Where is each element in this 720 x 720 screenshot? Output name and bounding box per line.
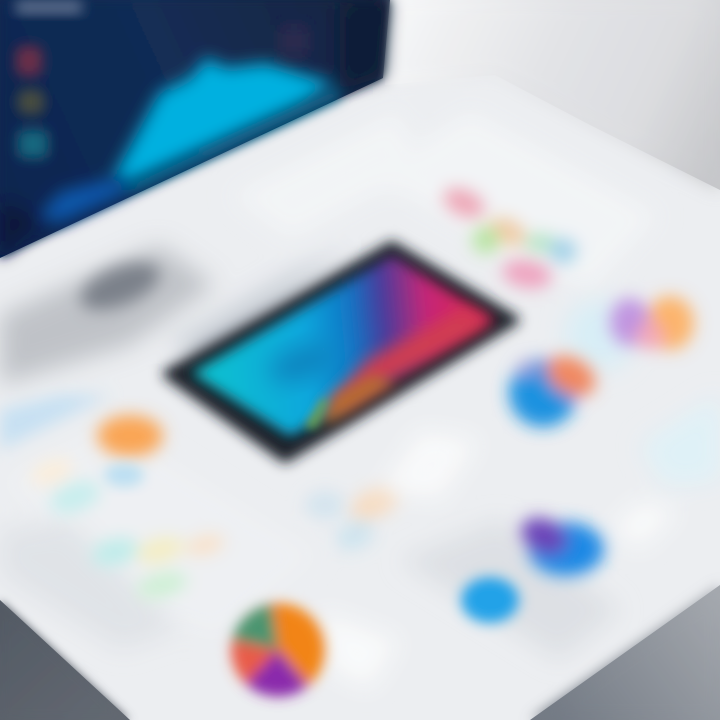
panel: right pale blue card — [640, 395, 720, 485]
monitor dark left corner — [0, 200, 40, 258]
panel: left blue strip — [0, 395, 110, 450]
chart: left pastel bars — [27, 453, 104, 519]
faint purple block — [280, 25, 308, 57]
monitor — [0, 0, 390, 258]
area chart — [112, 57, 335, 182]
icon: orange circle — [97, 415, 163, 457]
icon: multicolour pie bottom — [231, 603, 325, 697]
monitor screen — [0, 0, 390, 258]
icon: pale blue circle — [104, 463, 144, 487]
screen orange wedge — [318, 375, 395, 425]
tablet screen — [192, 256, 495, 436]
panel: card highlights — [320, 430, 680, 690]
tablet body — [168, 246, 514, 458]
screen red wedge — [325, 310, 488, 408]
top highlight — [16, 0, 82, 14]
panel: lower left card — [0, 425, 320, 640]
monitor stand — [74, 253, 166, 319]
panel: top right card — [370, 110, 660, 290]
icon: purple and blue circle — [515, 510, 604, 576]
chart: lower left multicolour bars — [88, 530, 227, 603]
icon: pie chart centre right — [509, 347, 603, 427]
monitor base area — [0, 110, 420, 385]
screen dark blue patch — [265, 338, 339, 388]
panel: lower right card shade — [400, 520, 620, 660]
floor corner: bottom left — [0, 600, 130, 720]
sidebar legend — [16, 46, 48, 158]
area chart edge — [120, 88, 340, 190]
floor corner: bottom right — [530, 585, 720, 720]
screen green wedge — [304, 398, 328, 428]
tablet — [168, 246, 514, 458]
monitor dark right corner — [340, 0, 390, 90]
icon: blue circle — [461, 577, 519, 623]
icon: pie chart right — [610, 296, 694, 350]
panel: lower left shade — [0, 520, 180, 650]
chart: centre pastel bars — [305, 447, 457, 556]
chart: top right multicolour bars — [439, 182, 577, 292]
wall — [385, 0, 720, 190]
lower chart — [38, 178, 130, 222]
panel: pale blue halo — [565, 300, 635, 370]
